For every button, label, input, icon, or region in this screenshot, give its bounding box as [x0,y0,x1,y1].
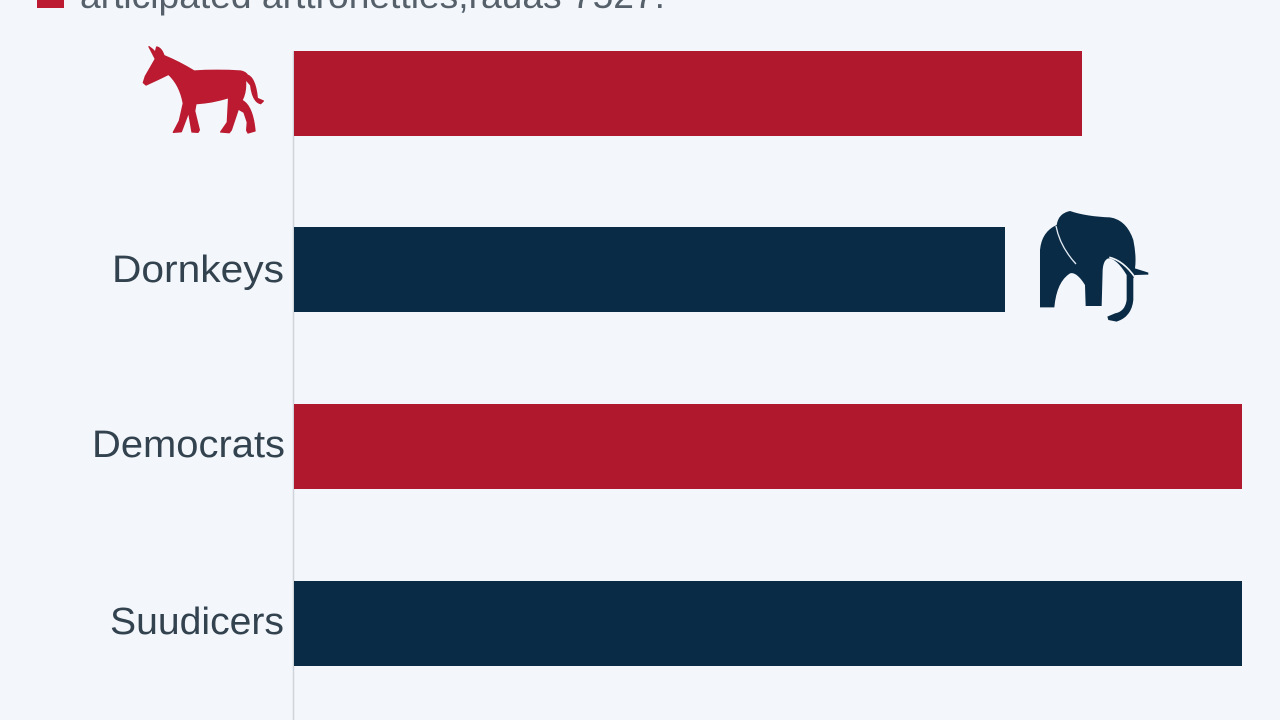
label: Dornkeys: Dornkeys [112,249,284,291]
bar: navy row 2 [294,227,1005,312]
bar: red row 1 [294,51,1082,136]
bar: navy row 4 [294,581,1242,666]
legend: cropped legend entry at top [37,0,665,16]
axis line [292,51,294,720]
icon: donkey [143,47,263,133]
label: Suudicers: Suudicers [110,601,284,643]
icon: elephant [1040,211,1148,322]
legend swatch [37,0,64,8]
bar: red row 3 [294,404,1242,489]
label: Democrats: Democrats [92,424,285,466]
